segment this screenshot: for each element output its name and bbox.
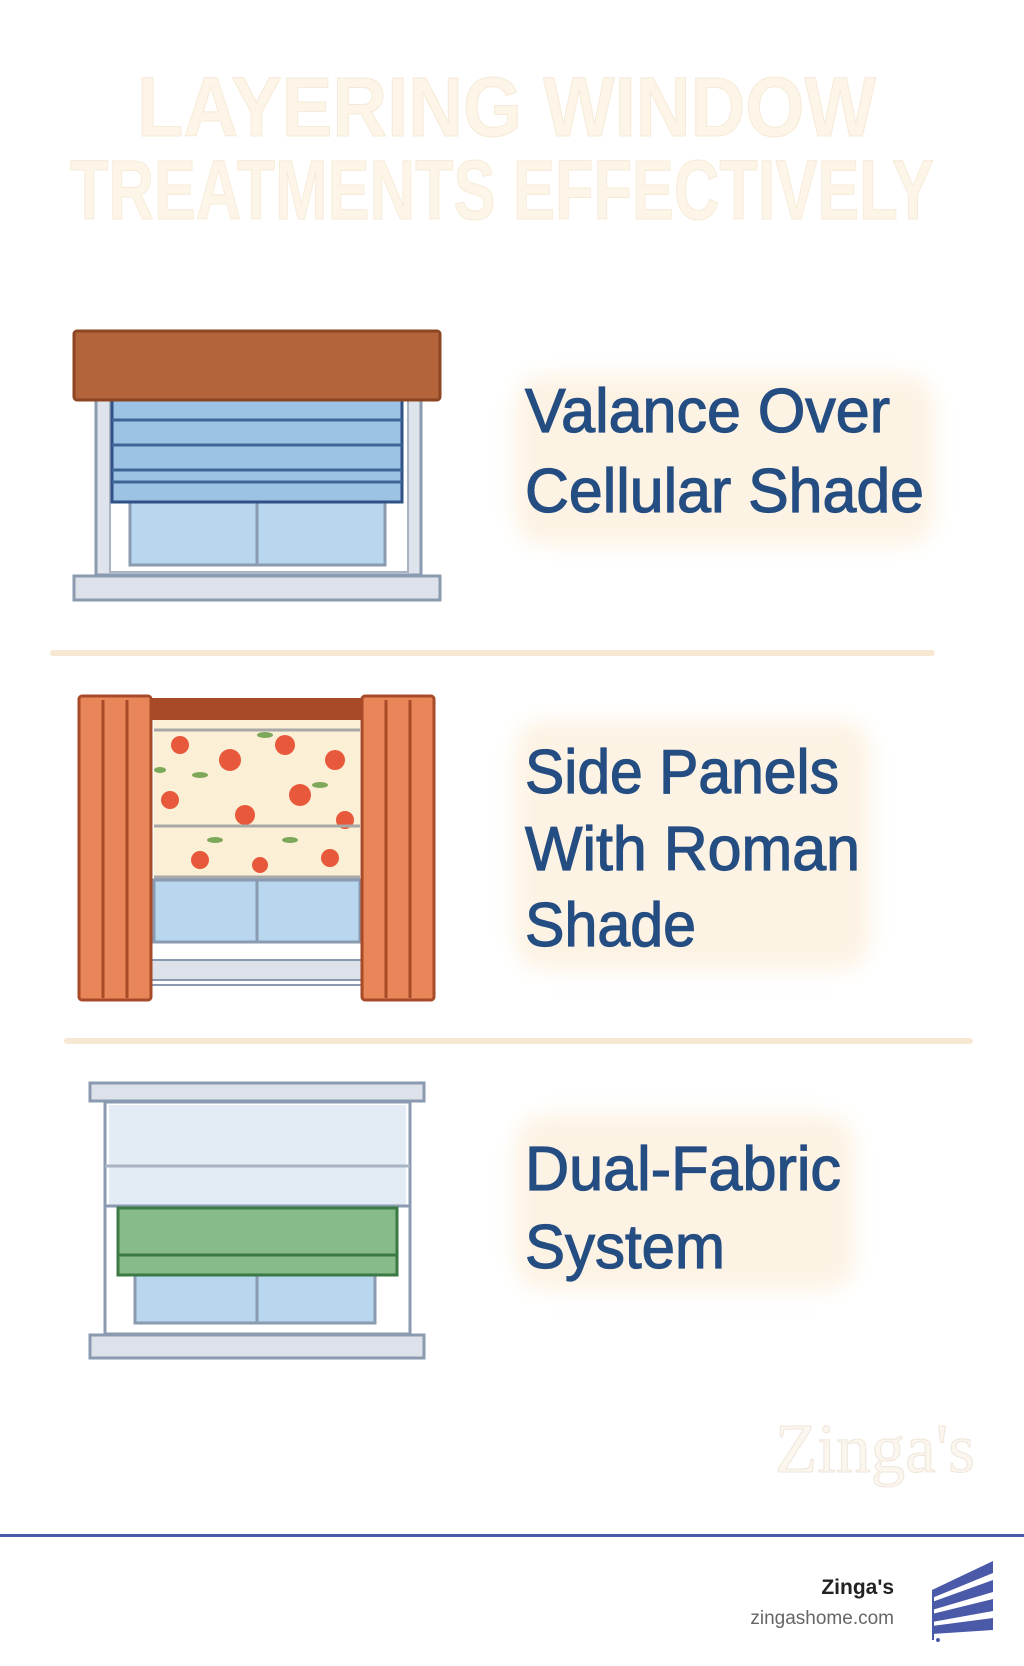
icon: blinds logo xyxy=(932,1561,993,1642)
text block: valance label xyxy=(515,375,935,545)
text block: side panels label: Shade xyxy=(525,891,696,960)
panel: side panels with roman shade xyxy=(79,696,870,1000)
title: LAYERING WINDOW xyxy=(137,60,877,154)
footer brand xyxy=(750,1561,993,1642)
text block: valance label: Cellular Shade xyxy=(525,457,924,526)
icon: window with dual shade xyxy=(90,1083,424,1358)
text block: side panels label: Side Panels xyxy=(525,738,839,807)
panel: dual-fabric system xyxy=(90,1083,855,1358)
text block: dual-fabric label: System xyxy=(525,1213,725,1282)
footer brand: zingashome.com xyxy=(750,1608,894,1629)
icon: window with valance xyxy=(74,331,440,600)
text block: dual-fabric label: Dual-Fabric xyxy=(525,1135,841,1204)
text block: valance label: Valance Over xyxy=(525,377,890,446)
footer brand: Zinga's xyxy=(821,1576,894,1599)
text block: side panels label xyxy=(515,720,870,970)
text block: dual-fabric label xyxy=(515,1115,855,1290)
icon: window with curtains and floral roman shade xyxy=(79,696,434,1000)
watermark: Zinga's xyxy=(775,1411,975,1488)
text block: side panels label: With Roman xyxy=(525,815,860,884)
title xyxy=(70,60,934,237)
panel: valance over cellular shade xyxy=(74,331,935,600)
